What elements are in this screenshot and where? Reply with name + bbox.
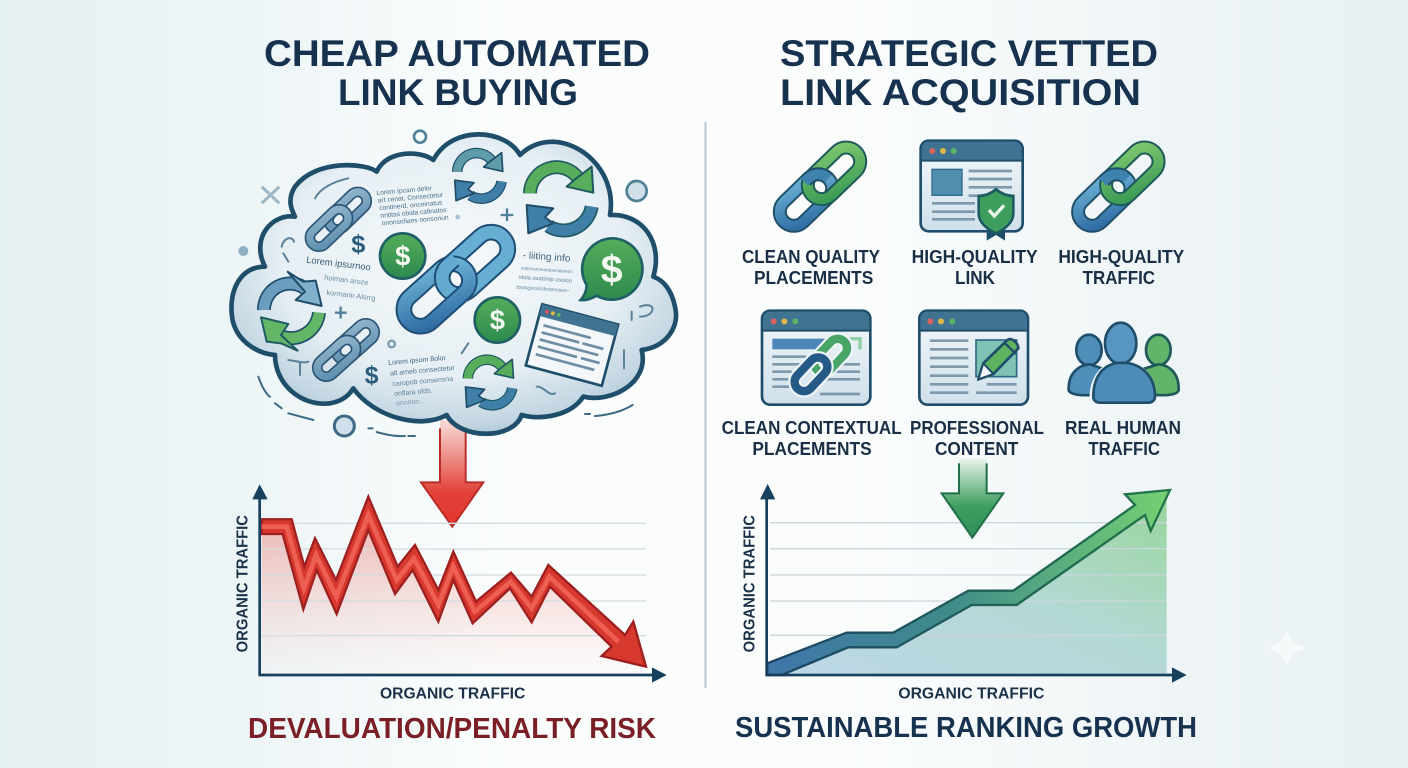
icon: dollar signs <box>351 231 379 389</box>
growth line with arrow <box>767 490 1170 675</box>
text: listing info: tootsgsrosrsfootmosoo~ <box>516 285 570 294</box>
icon: browser with chain <box>762 311 870 405</box>
icon: dollar signs: $ <box>351 231 365 259</box>
decorative bubbles <box>238 131 652 436</box>
icon: browser with pencil <box>919 311 1028 405</box>
icon: dollar signs: $ <box>365 362 379 389</box>
title: cheap automated link buying: LINK BUYING <box>338 72 578 113</box>
text: lorem block top: Lorem Ipcam delor <box>376 185 433 197</box>
icon: small chain top left <box>306 188 370 250</box>
y axis label: ORGANIC TRAFFIC <box>742 515 759 652</box>
label: clean contextual placements: PLACEMENTS <box>752 438 872 459</box>
label: high-quality link <box>912 246 1038 288</box>
label: high-quality traffic: TRAFFIC <box>1083 267 1155 288</box>
label: high-quality link: LINK <box>955 267 996 288</box>
text: lorem block top <box>376 184 449 228</box>
label: professional content <box>910 417 1044 459</box>
icon: dollar speech bubble: $ <box>601 247 623 291</box>
text: lorem block bottom: onflara ofds. <box>394 388 433 398</box>
icon: sparkle watermark <box>1266 628 1308 668</box>
title: cheap automated link buying <box>264 33 650 113</box>
axes <box>260 495 655 675</box>
icon: dollar coin upper <box>380 233 425 279</box>
label: clean contextual placements: CLEAN CONTEXTUAL <box>722 417 902 438</box>
icon: people group <box>1069 323 1179 404</box>
label: professional content: CONTENT <box>935 438 1019 459</box>
text: lorem block bottom: Lorem ipsom 8olor <box>388 355 447 367</box>
label: real human traffic: TRAFFIC <box>1088 438 1160 459</box>
x axis label: ORGANIC TRAFFIC <box>380 685 526 702</box>
icon: dollar coin lower <box>475 297 520 343</box>
text: lorem block left: Lorem ipsurnoo <box>306 255 371 273</box>
label: high-quality traffic <box>1058 246 1185 288</box>
text: lorem block bottom: alt ameb consectetur <box>390 365 456 378</box>
text: lorem block top: continerd, onceinatus <box>379 200 443 212</box>
x axis label: ORGANIC TRAFFIC <box>898 685 1045 702</box>
icon: browser with shield <box>921 141 1023 241</box>
area fill <box>767 500 1167 673</box>
text: lorem block bottom: caropob consensna <box>392 376 454 388</box>
text: listing info: ntoia ooatsnip osoioo <box>518 275 572 284</box>
axis arrowheads <box>252 484 667 683</box>
label: high-quality link: HIGH-QUALITY <box>912 246 1038 267</box>
divider <box>704 122 706 688</box>
label: clean quality placements: CLEAN QUALITY <box>742 246 881 267</box>
icon: refresh arrows right <box>527 167 593 233</box>
label: real human traffic: REAL HUMAN <box>1065 417 1181 438</box>
arrow: green down arrow <box>942 458 1003 538</box>
icon: dollar speech bubble <box>581 238 642 300</box>
y axis label: ORGANIC TRAFFIC <box>234 515 251 652</box>
text: lorem block top: art cenat, Consectetur <box>378 192 444 205</box>
cloud shape <box>231 134 676 434</box>
chart: declining organic traffic <box>234 484 667 702</box>
label: professional content: PROFESSIONAL <box>910 417 1044 438</box>
icon: refresh arrows top <box>455 153 503 201</box>
icon: refresh arrows bottom <box>465 359 513 407</box>
grid lines <box>262 523 646 636</box>
title: cheap automated link buying: CHEAP AUTOMATED <box>264 33 650 74</box>
icon: dollar coin upper: $ <box>395 241 410 272</box>
label: real human traffic <box>1065 417 1181 459</box>
caption: devaluation penalty risk: DEVALUATION/PENALTY RISK <box>248 713 656 745</box>
declining line with arrow <box>262 497 646 667</box>
text: listing info: - liiting info <box>522 250 571 265</box>
text: lorem block left: kormanir Alsrrg <box>326 288 376 303</box>
text: lorem block bottom <box>388 354 458 408</box>
label: clean quality placements <box>742 246 881 288</box>
title: strategic vetted link acquisition: STRATEGIC VETTED <box>780 33 1158 74</box>
icon: refresh arrows left <box>261 272 322 351</box>
text: lorem block top: ononsofiaes oonsonun <box>382 214 449 227</box>
area fill <box>262 523 646 675</box>
line highlight <box>262 515 618 642</box>
icon: big central chain <box>397 225 515 333</box>
text: lorem block bottom: ononoo... <box>396 398 425 407</box>
label: high-quality traffic: HIGH-QUALITY <box>1058 246 1185 267</box>
title: strategic vetted link acquisition <box>780 33 1158 113</box>
text: listing info: ontionsnoeaotoonstsmon <box>521 266 573 274</box>
icon: chain clean quality placements <box>774 142 866 232</box>
grid lines <box>770 523 1167 635</box>
caption: sustainable ranking growth: SUSTAINABLE RANKING GROWTH <box>735 712 1197 744</box>
icon: small chain bottom left <box>314 320 378 380</box>
panel: link buying cloud <box>231 131 676 436</box>
axis arrowheads <box>760 484 1187 683</box>
text: lorem block left: hoiman aroze <box>324 273 369 287</box>
icon: chain high-quality traffic <box>1072 142 1164 232</box>
icon: browser window in cloud <box>526 304 618 386</box>
axes <box>767 497 1175 675</box>
label: clean quality placements: PLACEMENTS <box>754 267 873 288</box>
chart: growing organic traffic <box>742 484 1187 702</box>
label: clean contextual placements <box>722 417 902 459</box>
icon: dollar coin lower: $ <box>490 305 505 336</box>
text: listing info <box>516 250 574 294</box>
panel: quality icons grid <box>722 141 1185 459</box>
text: lorem block top: ontitas obida cafinatos <box>380 207 447 220</box>
title: strategic vetted link acquisition: LINK ACQUISITION <box>780 72 1141 113</box>
text: lorem block left <box>302 255 380 303</box>
arrow: red down arrow <box>421 420 483 527</box>
